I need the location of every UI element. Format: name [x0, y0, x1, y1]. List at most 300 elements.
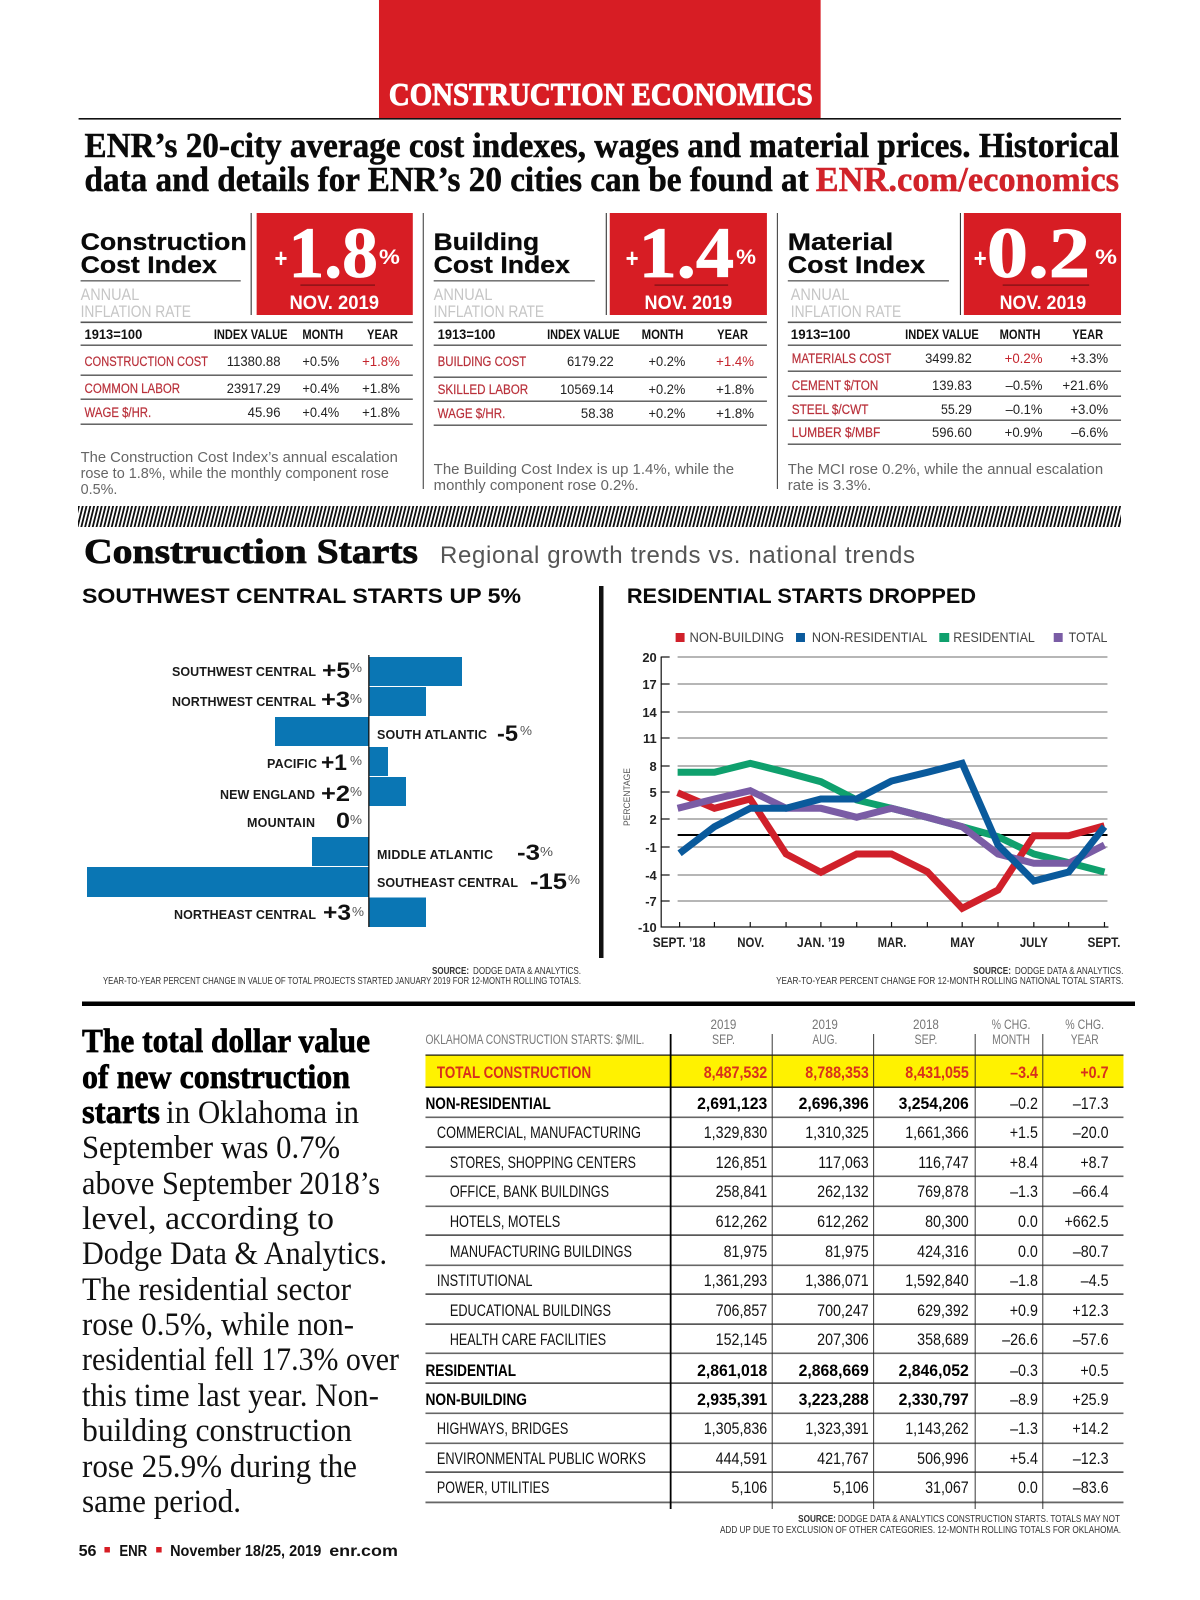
table: +0.2%	[1005, 350, 1042, 366]
table: +3.3%	[1070, 350, 1108, 366]
panel: construction cost index	[81, 213, 413, 498]
legend: NON-BUILDING	[690, 630, 784, 645]
bar chart: NEW ENGLAND	[220, 788, 315, 802]
table rows: +8.7	[1080, 1154, 1109, 1172]
body text: total dollar value: September was 0.7%	[82, 1130, 340, 1166]
table rows: 2,868,669	[799, 1362, 869, 1380]
line chart: 14	[642, 705, 657, 720]
table: YEAR	[1072, 327, 1103, 342]
bar chart: PACIFIC	[267, 757, 317, 771]
source note: SOURCE:	[432, 966, 469, 977]
heading: Construction	[81, 229, 247, 256]
bar chart: %	[540, 844, 553, 859]
table rows: –17.3	[1073, 1095, 1109, 1113]
header banner	[379, 0, 821, 118]
source note: YEAR-TO-YEAR PERCENT CHANGE IN VALUE OF TOTAL PROJECTS STARTED JANUARY 2019 FOR 12-MONTH ROLLING TOTALS.	[103, 976, 581, 987]
table: MATERIALS COST	[792, 350, 892, 366]
body text: total dollar value: this time last year. Non-	[82, 1378, 379, 1414]
body text: total dollar value: starts	[82, 1094, 160, 1131]
table rows: OFFICE, BANK BUILDINGS	[450, 1183, 609, 1201]
table header: YEAR	[1071, 1031, 1099, 1047]
table rows: 769,878	[917, 1183, 969, 1201]
bar chart: +3	[321, 687, 350, 712]
table: 3499.82	[925, 350, 972, 366]
bar chart: SOUTH ATLANTIC	[377, 728, 487, 742]
table: 45.96	[248, 404, 281, 420]
table rows: 358,689	[917, 1331, 969, 1349]
bar chart: -5	[497, 721, 518, 746]
table rows: EDUCATIONAL BUILDINGS	[450, 1302, 611, 1320]
table: +0.2%	[649, 381, 685, 397]
bar chart: 0	[336, 808, 350, 833]
table rows: 1,305,836	[704, 1420, 767, 1438]
table: 55.29	[941, 401, 972, 417]
table: MONTH	[642, 327, 683, 342]
bar chart: NORTHEAST CENTRAL	[174, 908, 316, 922]
header banner: CONSTRUCTION ECONOMICS	[389, 77, 813, 112]
note text: rose to 1.8%, while the monthly component rose	[81, 465, 389, 482]
table rows: 612,262	[716, 1213, 767, 1231]
table: INDEX VALUE	[905, 327, 979, 342]
bar chart: NORTHWEST CENTRAL	[172, 695, 316, 709]
note text	[434, 461, 734, 494]
table rows: 81,975	[724, 1243, 767, 1261]
table rows: 1,361,293	[704, 1272, 767, 1290]
table rows: 629,392	[917, 1302, 969, 1320]
callout: +1.8%: +	[275, 245, 287, 273]
legend: NON-RESIDENTIAL	[812, 630, 928, 645]
bar chart: MOUNTAIN	[247, 816, 315, 830]
table rows: HIGHWAYS, BRIDGES	[437, 1420, 568, 1438]
source note: ADD UP DUE TO EXCLUSION OF OTHER CATEGORIES. 12-MONTH ROLLING TOTALS FOR OKLAHOMA.	[720, 1525, 1121, 1536]
callout: +1.4%: +	[626, 245, 639, 273]
table rows: 5,106	[732, 1479, 767, 1497]
line chart: MAY	[950, 935, 975, 950]
chart title: SOUTHWEST CENTRAL STARTS UP 5%	[82, 585, 521, 608]
line chart: 8	[650, 759, 657, 774]
table: MONTH	[1000, 327, 1040, 342]
heading: INFLATION RATE	[434, 302, 544, 321]
source note	[776, 966, 1123, 987]
table rows: 0.0	[1018, 1243, 1038, 1261]
table rows: 262,132	[817, 1183, 869, 1201]
table rows: 0.0	[1018, 1479, 1038, 1497]
panel: material cost index	[788, 213, 1121, 494]
table: COMMON LABOR	[85, 380, 180, 396]
body text: total dollar value: of new construction	[82, 1059, 350, 1096]
bar chart: %	[350, 660, 362, 675]
highlighted row: total construction: +0.7	[1080, 1064, 1109, 1082]
body text: total dollar value: rose 0.5%, while non-	[82, 1307, 354, 1343]
table: +1.8%	[362, 404, 400, 420]
table rows: 152,145	[716, 1331, 767, 1349]
table rows: 31,067	[925, 1479, 969, 1497]
bar chart: SOUTHEAST CENTRAL	[377, 876, 518, 890]
table: 10569.14	[560, 381, 614, 397]
table rows: HEALTH CARE FACILITIES	[450, 1331, 606, 1349]
table: +1.4%	[716, 353, 754, 369]
table rows: –80.7	[1073, 1243, 1109, 1261]
table rows: 2,691,123	[697, 1095, 767, 1113]
table: INDEX VALUE	[214, 327, 287, 342]
body text: total dollar value: The residential sector	[82, 1272, 351, 1308]
heading: INFLATION RATE	[81, 302, 191, 321]
heading: ANNUAL	[81, 285, 139, 304]
table rows: STORES, SHOPPING CENTERS	[450, 1154, 636, 1172]
table rows: 1,323,391	[805, 1420, 869, 1438]
top section: cost indexes	[79, 0, 1121, 498]
body text: total dollar value: level, according to	[82, 1201, 334, 1237]
footer	[79, 1543, 398, 1560]
table: –0.1%	[1006, 401, 1042, 417]
table rows: –0.3	[1010, 1362, 1038, 1380]
table rows: 3,254,206	[899, 1095, 969, 1113]
callout: +0.2%: +	[974, 245, 987, 273]
table: +1.8%	[362, 353, 400, 369]
callout: +1.4%: %	[736, 246, 756, 269]
source note	[720, 1514, 1121, 1536]
bar chart: +2	[321, 781, 350, 806]
body text: total dollar value: residential fell 17.3% over	[82, 1342, 399, 1378]
heading	[81, 229, 247, 321]
footer: enr.com	[329, 1543, 398, 1560]
table rows: +25.9	[1072, 1391, 1109, 1409]
callout: +1.8%: NOV. 2019	[289, 293, 379, 314]
highlighted row: total construction: 8,487,532	[704, 1064, 767, 1082]
line chart: 2	[650, 812, 657, 827]
table rows: MANUFACTURING BUILDINGS	[450, 1243, 632, 1261]
table rows: +662.5	[1064, 1213, 1109, 1231]
source note: DODGE DATA & ANALYTICS.	[473, 966, 581, 977]
bar chart: %	[350, 812, 362, 827]
table: +0.5%	[302, 353, 339, 369]
heading	[788, 229, 949, 321]
table rows: 1,329,830	[704, 1124, 767, 1142]
line chart: NOV.	[737, 935, 764, 950]
callout: +1.4%: NOV. 2019	[645, 293, 732, 314]
heading: Cost Index	[434, 252, 571, 279]
table rows: RESIDENTIAL	[425, 1362, 516, 1380]
table: YEAR	[717, 327, 748, 342]
table rows: 0.0	[1018, 1213, 1038, 1231]
table: –6.6%	[1071, 424, 1108, 440]
highlighted row: total construction: –3.4	[1010, 1064, 1038, 1082]
body text: total dollar value: same period.	[82, 1484, 241, 1520]
table rows: 444,591	[716, 1450, 767, 1468]
bar chart: %	[520, 723, 532, 738]
table: 6179.22	[567, 353, 614, 369]
table rows: –66.4	[1073, 1183, 1109, 1201]
panel: building cost index	[434, 213, 767, 494]
table	[434, 322, 767, 426]
note text: 0.5%.	[81, 481, 117, 498]
table rows: +0.9	[1010, 1302, 1038, 1320]
highlighted row: total construction: 8,431,055	[905, 1064, 969, 1082]
source note: DODGE DATA & ANALYTICS CONSTRUCTION STARTS. TOTALS MAY NOT	[838, 1514, 1120, 1525]
body text: total dollar value: in Oklahoma in	[166, 1095, 359, 1131]
table header: % CHG.	[1065, 1016, 1104, 1032]
table rows: –1.8	[1010, 1272, 1038, 1290]
heading: Cost Index	[788, 252, 926, 279]
bar chart: +5	[322, 658, 350, 683]
intro headline: ENR.com/economics	[816, 160, 1119, 199]
table rows: 706,857	[716, 1302, 767, 1320]
heading	[434, 229, 595, 321]
table: MONTH	[302, 327, 343, 342]
table rows: 2,861,018	[697, 1362, 767, 1380]
legend: RESIDENTIAL	[953, 630, 1035, 645]
body text: total dollar value: above September 2018’s	[82, 1166, 380, 1202]
bar chart: %	[350, 691, 362, 706]
body text: total dollar value	[82, 1023, 399, 1520]
bar chart: %	[352, 904, 364, 919]
body text: total dollar value: Dodge Data & Analytics.	[82, 1236, 387, 1272]
table rows: –8.9	[1010, 1391, 1038, 1409]
table: +1.8%	[716, 405, 754, 421]
table rows: +14.2	[1072, 1420, 1109, 1438]
note text	[81, 449, 398, 498]
source note: YEAR-TO-YEAR PERCENT CHANGE FOR 12-MONTH ROLLING NATIONAL TOTAL STARTS.	[776, 976, 1123, 987]
bar chart: +3	[323, 900, 351, 925]
table rows: INSTITUTIONAL	[437, 1272, 532, 1290]
line chart	[622, 650, 1120, 950]
intro headline: ENR’s 20-city average cost indexes, wages and material prices. Historical	[85, 126, 1119, 165]
table: +0.4%	[302, 380, 339, 396]
heading: Material	[788, 229, 893, 256]
table rows: 81,975	[825, 1243, 869, 1261]
body text: total dollar value: The total dollar value	[82, 1023, 370, 1060]
bar chart: %	[568, 872, 580, 887]
table: CONSTRUCTION COST	[85, 353, 208, 369]
table rows: NON-RESIDENTIAL	[425, 1095, 551, 1113]
footer: ENR	[119, 1543, 148, 1560]
body text: total dollar value: building construction	[82, 1413, 352, 1449]
table: SKILLED LABOR	[438, 381, 528, 397]
table rows: 424,316	[917, 1243, 969, 1261]
table rows: 1,386,071	[805, 1272, 869, 1290]
chart title: RESIDENTIAL STARTS DROPPED	[627, 585, 976, 608]
table: +1.8%	[716, 381, 754, 397]
table rows: 207,306	[817, 1331, 869, 1349]
table: 1913=100	[791, 327, 850, 342]
note text: The Building Cost Index is up 1.4%, while the	[434, 461, 734, 478]
source note	[103, 966, 581, 987]
table rows: 126,851	[716, 1154, 767, 1172]
line chart: PERCENTAGE	[622, 768, 633, 826]
highlighted row: total construction: 8,788,353	[805, 1064, 869, 1082]
table rows: COMMERCIAL, MANUFACTURING	[437, 1124, 641, 1142]
table rows: 700,247	[817, 1302, 869, 1320]
heading: ANNUAL	[791, 285, 849, 304]
bar chart: +1	[321, 750, 347, 775]
table rows: –83.6	[1073, 1479, 1109, 1497]
table: STEEL $/CWT	[792, 401, 869, 417]
table rows: 421,767	[817, 1450, 869, 1468]
table header: AUG.	[813, 1031, 837, 1047]
section heading: construction starts: Regional growth trends vs. national trends	[440, 542, 915, 569]
line chart: 5	[650, 785, 657, 800]
table rows: –12.3	[1073, 1450, 1109, 1468]
table: +1.8%	[362, 380, 400, 396]
table rows: 116,747	[918, 1154, 969, 1172]
line chart: JAN. ’19	[797, 935, 845, 950]
heading: ANNUAL	[434, 285, 492, 304]
bar chart: %	[350, 784, 362, 799]
callout: +0.2%: NOV. 2019	[1000, 293, 1086, 314]
callout: +1.8%: %	[379, 246, 400, 269]
table: +0.2%	[649, 353, 685, 369]
section heading: construction starts	[84, 532, 915, 571]
callout: +1.4%: 1.4	[639, 213, 734, 293]
line chart: 17	[642, 677, 657, 692]
table: +0.2%	[649, 405, 685, 421]
line chart: 20	[642, 650, 657, 665]
legend	[676, 630, 1108, 645]
bar chart: %	[350, 753, 362, 768]
bar chart: -15	[530, 869, 567, 894]
source note: SOURCE:	[973, 966, 1011, 977]
intro headline	[85, 126, 1119, 199]
table rows	[425, 1095, 1109, 1497]
table rows: 1,143,262	[905, 1420, 969, 1438]
table rows: +5.4	[1010, 1450, 1038, 1468]
body text: total dollar value: rose 25.9% during the	[82, 1449, 357, 1485]
table: 1913=100	[85, 327, 142, 342]
footer: November 18/25, 2019	[170, 1543, 321, 1560]
bar chart: MIDDLE ATLANTIC	[377, 848, 493, 862]
table: WAGE $/HR.	[438, 405, 505, 421]
table rows: –1.3	[1010, 1183, 1038, 1201]
table rows: 3,223,288	[799, 1391, 869, 1409]
table rows: 2,935,391	[697, 1391, 767, 1409]
callout: +1.4%	[610, 213, 767, 315]
table rows: 1,310,325	[805, 1124, 869, 1142]
table: 11380.88	[227, 353, 281, 369]
table header: SEP.	[915, 1031, 937, 1047]
callout: +1.8%: 1.8	[288, 213, 378, 293]
table rows: NON-BUILDING	[425, 1391, 527, 1409]
source note: DODGE DATA & ANALYTICS.	[1015, 966, 1123, 977]
table: 58.38	[581, 405, 614, 421]
table header: OKLAHOMA CONSTRUCTION STARTS: $/MIL.	[425, 1031, 644, 1047]
table rows: 117,063	[818, 1154, 869, 1172]
table: INDEX VALUE	[547, 327, 620, 342]
table: CEMENT $/TON	[792, 377, 878, 393]
callout: +0.2%: 0.2	[987, 213, 1090, 293]
heading: Cost Index	[81, 252, 218, 279]
line chart: JULY	[1020, 935, 1048, 950]
table header: MONTH	[992, 1031, 1030, 1047]
table header: 2019	[812, 1016, 838, 1032]
table: +0.4%	[302, 404, 339, 420]
table: 596.60	[932, 424, 972, 440]
note text: rate is 3.3%.	[788, 477, 871, 494]
table rows: +8.4	[1010, 1154, 1038, 1172]
table header: % CHG.	[992, 1016, 1030, 1032]
table header	[425, 1016, 1104, 1047]
note text	[788, 461, 1103, 494]
table: WAGE $/HR.	[85, 404, 151, 420]
table: YEAR	[367, 327, 398, 342]
line chart: -1	[645, 840, 657, 855]
table rows: ENVIRONMENTAL PUBLIC WORKS	[437, 1450, 646, 1468]
line chart: MAR.	[878, 935, 906, 950]
table: BUILDING COST	[438, 353, 527, 369]
table rows: +12.3	[1072, 1302, 1109, 1320]
bar chart: -3	[517, 840, 540, 865]
table rows: 2,696,396	[799, 1095, 869, 1113]
table: LUMBER $/MBF	[792, 424, 880, 440]
table: +3.0%	[1070, 401, 1108, 417]
table header: 2019	[711, 1016, 737, 1032]
bar chart: SOUTHWEST CENTRAL	[172, 665, 316, 679]
line chart: 11	[643, 731, 657, 746]
table: +0.9%	[1005, 424, 1042, 440]
table rows: +0.5	[1080, 1362, 1109, 1380]
callout: +0.2%	[964, 213, 1121, 315]
table rows: +1.5	[1010, 1124, 1038, 1142]
note text: The MCI rose 0.2%, while the annual escalation	[788, 461, 1103, 478]
line chart: -7	[645, 894, 657, 909]
table: –0.5%	[1006, 377, 1042, 393]
table: 23917.29	[227, 380, 281, 396]
panel: line chart	[622, 585, 1123, 987]
heading: Building	[434, 229, 539, 256]
table: oklahoma construction starts	[425, 1016, 1123, 1536]
line chart: -4	[645, 868, 657, 883]
table	[788, 322, 1121, 445]
note text: The Construction Cost Index’s annual escalation	[81, 449, 398, 466]
table header: SEP.	[712, 1031, 735, 1047]
table rows: 1,592,840	[905, 1272, 969, 1290]
footer: 56	[79, 1543, 97, 1560]
table rows: HOTELS, MOTELS	[450, 1213, 560, 1231]
table rows: –4.5	[1081, 1272, 1109, 1290]
note text: monthly component rose 0.2%.	[434, 477, 639, 494]
line chart: SEPT.	[1088, 935, 1120, 950]
table: 139.83	[932, 377, 972, 393]
table rows: –1.3	[1010, 1420, 1038, 1438]
table rows: 258,841	[716, 1183, 767, 1201]
panel: regional bar chart	[82, 585, 581, 987]
intro headline: data and details for ENR’s 20 cities can be found at	[85, 160, 809, 199]
source note: SOURCE:	[798, 1514, 836, 1525]
table rows: –26.6	[1002, 1331, 1038, 1349]
table rows: 2,846,052	[899, 1362, 969, 1380]
callout: +1.8%	[257, 213, 413, 315]
highlighted row: total construction: TOTAL CONSTRUCTION	[437, 1064, 591, 1082]
table rows: 80,300	[925, 1213, 969, 1231]
table header: 2018	[913, 1016, 939, 1032]
line chart: SEPT. ’18	[653, 935, 706, 950]
table: 1913=100	[438, 327, 495, 342]
table	[81, 322, 413, 425]
highlighted row: total construction	[425, 1055, 1123, 1087]
bar chart	[87, 655, 580, 927]
table rows: 1,661,366	[905, 1124, 969, 1142]
callout: +0.2%: %	[1095, 246, 1117, 269]
table rows: –57.6	[1073, 1331, 1109, 1349]
legend: TOTAL	[1069, 630, 1108, 645]
table rows: 506,996	[917, 1450, 969, 1468]
heading: INFLATION RATE	[791, 302, 901, 321]
table rows: –20.0	[1073, 1124, 1109, 1142]
table rows: 612,262	[817, 1213, 869, 1231]
table: +21.6%	[1062, 377, 1108, 393]
table rows: POWER, UTILITIES	[437, 1479, 549, 1497]
table rows: 2,330,797	[899, 1391, 969, 1409]
table rows: 5,106	[833, 1479, 869, 1497]
